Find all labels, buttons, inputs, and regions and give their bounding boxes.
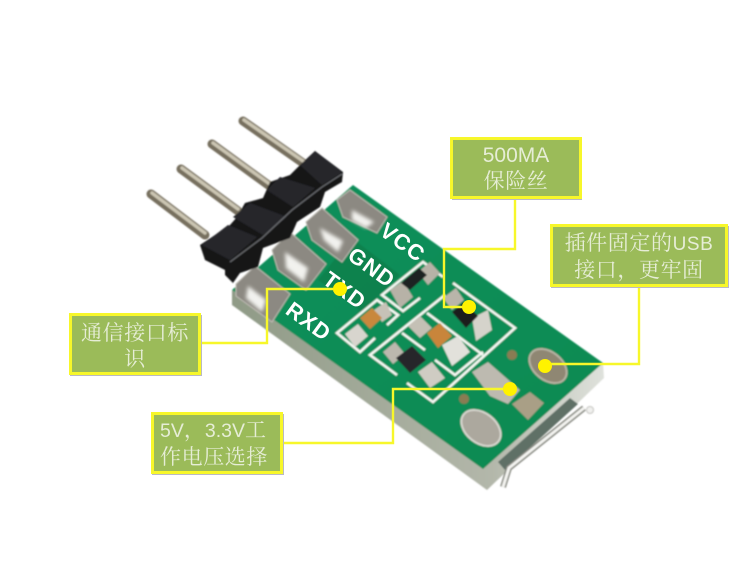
callout: 500MA fuse: 500MA [483,144,549,167]
callout: voltage select [152,414,284,475]
callout: interface labels: 通信接口标 [81,322,189,345]
leader line: interface labels [201,282,347,343]
label: VCC: VCC [375,218,430,267]
PCB top [232,185,603,469]
mounting pads and vias [454,342,573,453]
silkscreen outlines [337,262,515,402]
callout: voltage select: 5V，3.3V工 [160,419,266,443]
pad highlights [246,210,374,312]
PCB edge [232,290,604,490]
label: GND: GND [343,242,400,293]
label: TXD: TXD [318,266,371,314]
header solder pads [236,190,387,322]
module photo: PCB with pin header [151,120,604,490]
pins [151,121,303,235]
leader line: 500MA fuse [444,199,515,314]
callout: USB connector: 接口，更牢固 [574,259,704,283]
callout: USB connector [551,226,729,288]
SMD pads and components [345,262,544,420]
callout: 500MA fuse [452,138,582,200]
label: RXD: RXD [281,297,336,346]
callout: interface labels [70,314,202,376]
callout: USB connector: 插件固定的USB [565,232,713,255]
callout: 500MA fuse: 保险丝 [484,170,548,193]
callout: interface labels: 识 [124,348,146,371]
leader line: USB connector [538,287,639,373]
silkscreen pin labels [281,218,430,346]
leader line: voltage select [283,382,517,443]
USB connector [498,398,594,487]
black header housing [200,151,343,283]
callout: voltage select: 作电压选择 [160,446,268,469]
